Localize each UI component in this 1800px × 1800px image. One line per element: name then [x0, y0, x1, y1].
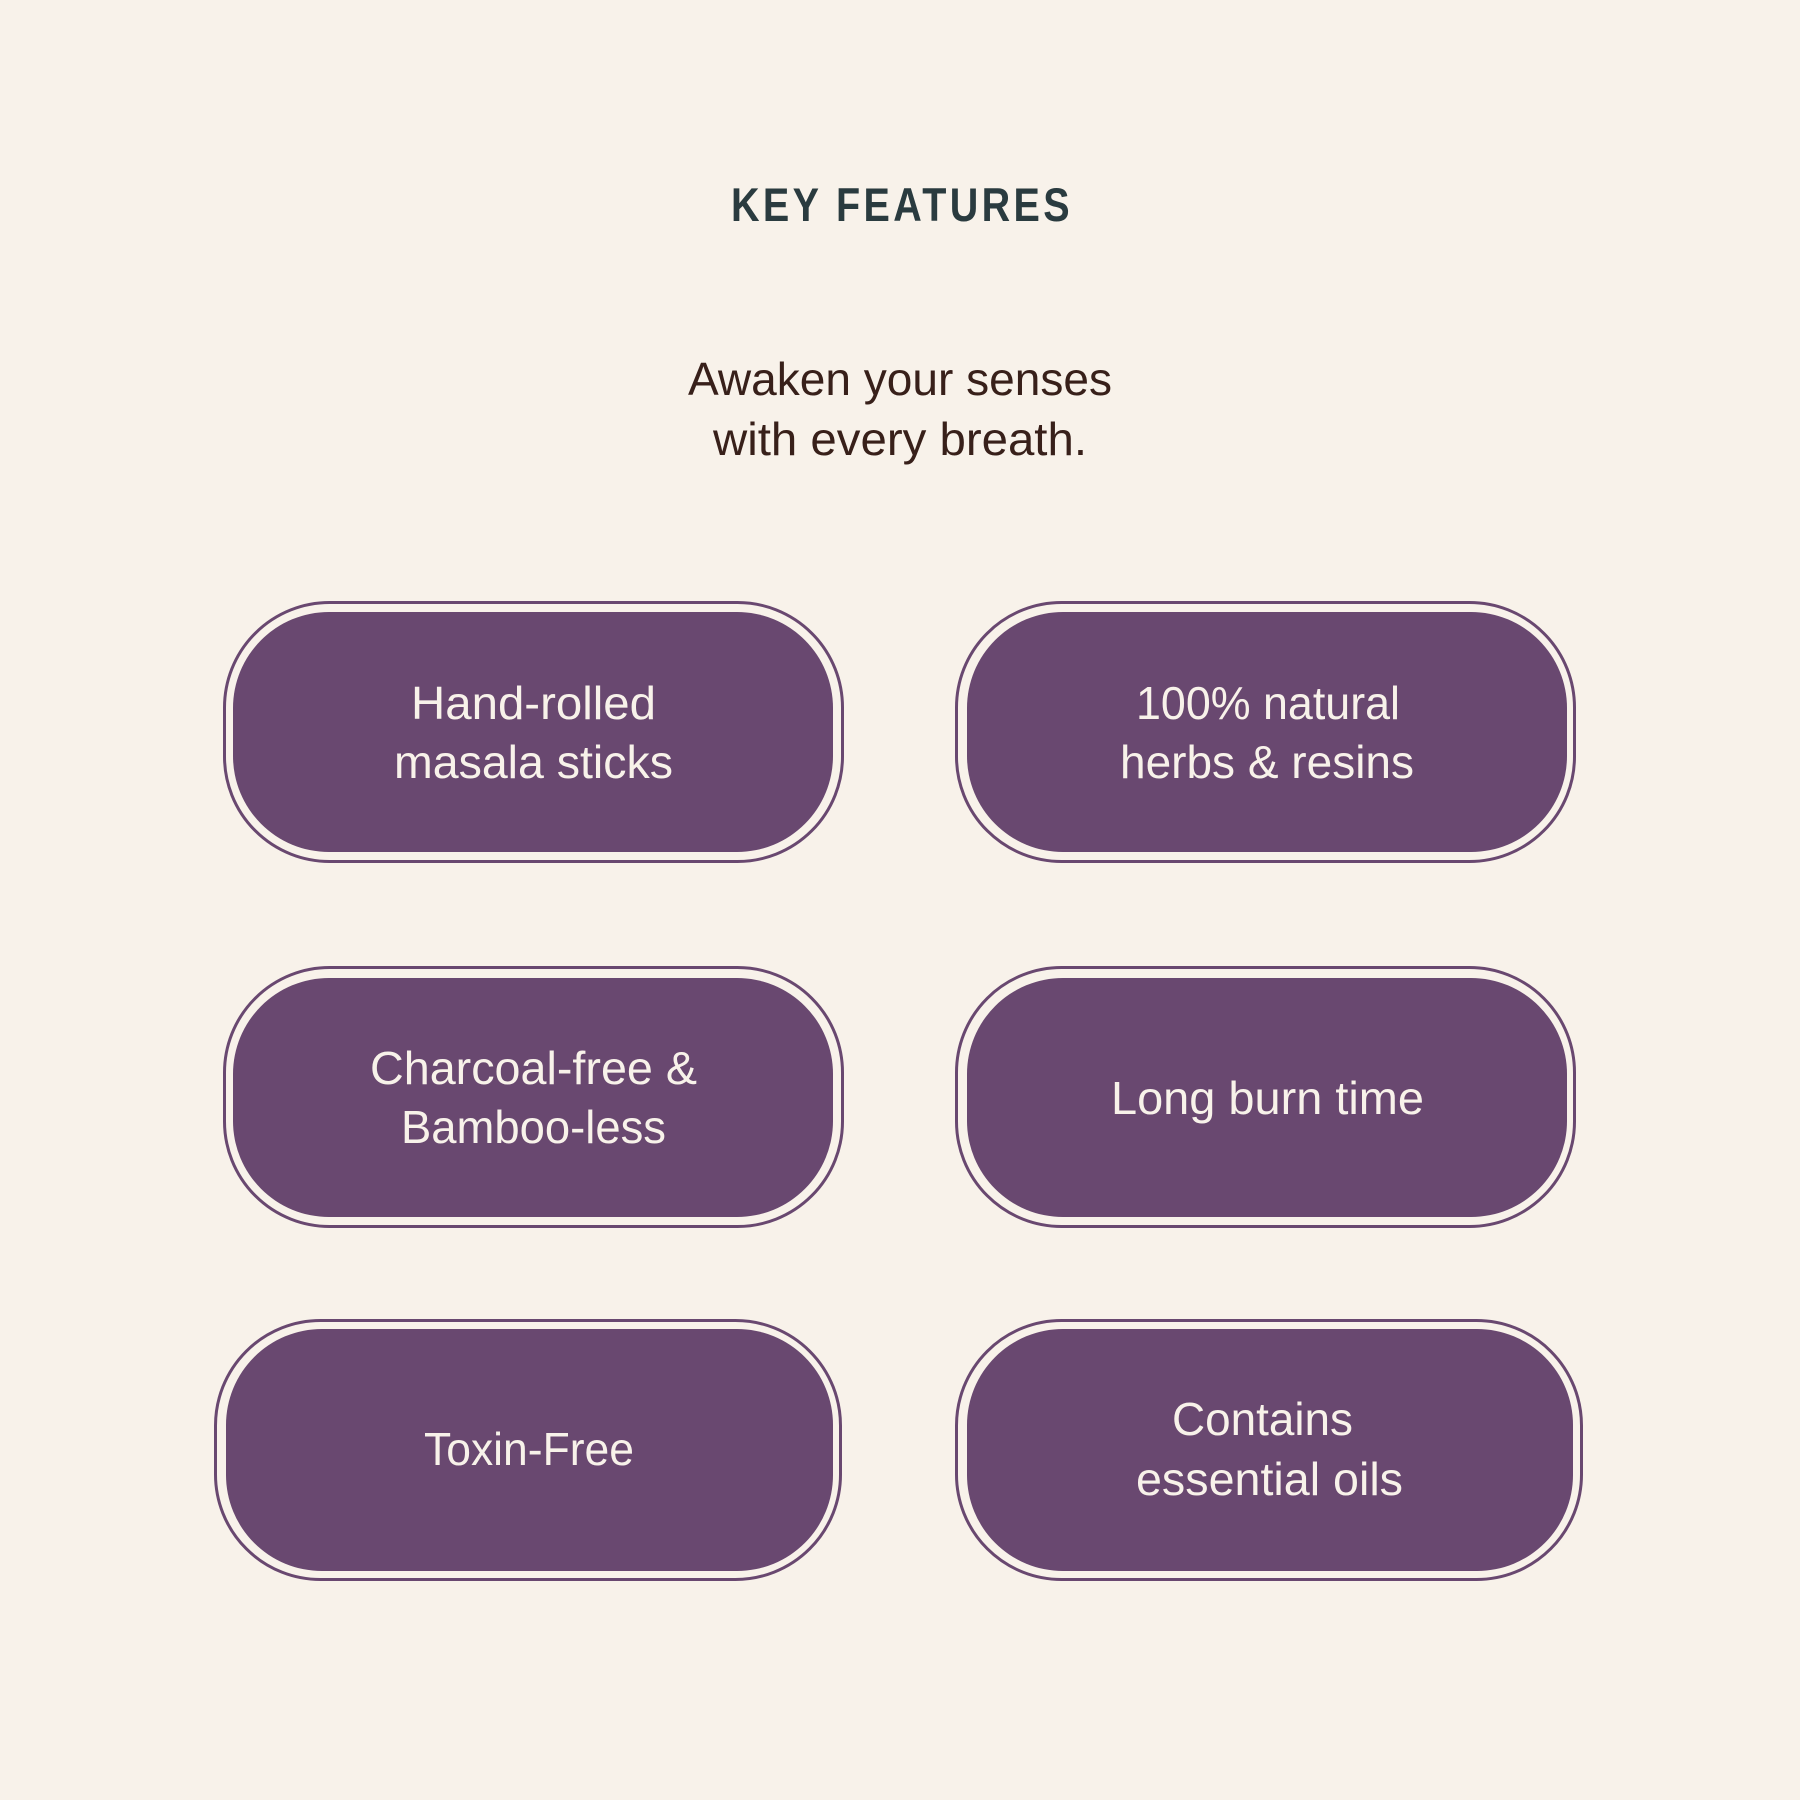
panel: contains essential oils	[956, 1320, 1582, 1580]
label: toxin-free: Toxin-Free	[424, 1423, 634, 1475]
label: contains essential oils: essential oils	[1136, 1453, 1403, 1505]
label: hand-rolled masala sticks	[394, 677, 673, 788]
panel: hand-rolled masala sticks	[224, 602, 842, 862]
label: contains essential oils: Contains	[1172, 1393, 1353, 1445]
label: charcoal-free and bamboo-less: Charcoal-free &	[370, 1042, 697, 1094]
panel: charcoal-free and bamboo-less	[224, 968, 842, 1226]
subtitle: with every breath.	[712, 413, 1087, 465]
panel: toxin-free	[216, 1320, 840, 1580]
label: contains essential oils	[1136, 1393, 1403, 1505]
label: long burn time: Long burn time	[1111, 1072, 1424, 1124]
panel: natural herbs and resins	[956, 602, 1574, 862]
label: hand-rolled masala sticks: masala sticks	[394, 736, 673, 788]
subtitle: Awaken your senses	[688, 353, 1112, 405]
label: natural herbs and resins	[1120, 677, 1414, 788]
label: natural herbs and resins: herbs & resins	[1120, 736, 1414, 788]
panel: long burn time	[956, 968, 1574, 1226]
label: hand-rolled masala sticks: Hand-rolled	[411, 677, 656, 729]
title: KEY FEATURES	[731, 178, 1073, 231]
subtitle	[688, 353, 1112, 465]
label: charcoal-free and bamboo-less: Bamboo-less	[401, 1101, 666, 1153]
label: natural herbs and resins: 100% natural	[1136, 677, 1400, 729]
label: charcoal-free and bamboo-less	[370, 1042, 697, 1153]
